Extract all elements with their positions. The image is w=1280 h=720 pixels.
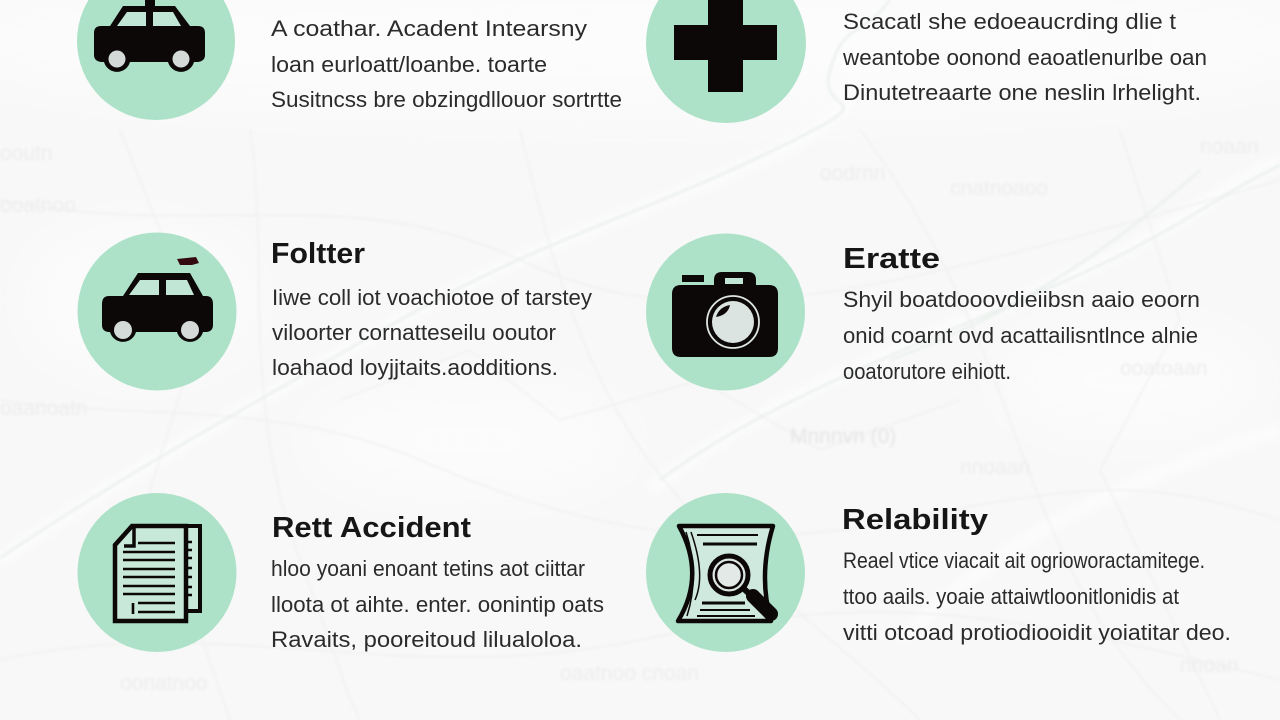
- panel: report accident item: [78, 493, 604, 652]
- icon: medical cross in circle: [646, 0, 806, 123]
- text: reliability description: ttoo aails. yoaie attaiwtloonitlonidis at: [843, 584, 1180, 609]
- text: accident description: loan eurloatt/loanbe. toarte: [271, 52, 547, 77]
- text: oodrnn: [820, 162, 885, 185]
- text: reliability description: Reael vtice viacait ait ogrioworactamitege.: [843, 548, 1205, 573]
- icon: documents in circle: [78, 493, 236, 652]
- panel: accident item: [77, 0, 622, 120]
- text: cnatnoaoo: [950, 177, 1048, 200]
- heading: Rett Accident: Rett Accident: [272, 512, 471, 544]
- text: reliability description: [843, 548, 1231, 645]
- text: first aid description: [842, 9, 1207, 105]
- text: accident description: Susitncss bre obzingdllouor sortrtte: [271, 87, 622, 112]
- icon: taxi car in circle: [77, 0, 235, 120]
- text: report description: [271, 556, 604, 652]
- text: report description: lloota ot aihte. enter. oonintip oats: [271, 592, 604, 617]
- text: evidence description: Shyil boatdooovdieiibsn aaio eoorn: [843, 287, 1200, 312]
- icon: car with flag in circle: [78, 232, 236, 390]
- text: folter description: loahaod loyjjtaits.aodditions.: [272, 355, 558, 380]
- text: Mnnnvn (0): [790, 425, 896, 448]
- text: oonatnoo: [120, 672, 208, 695]
- panel: first aid item: [646, 0, 1207, 123]
- text: accident description: A coathar. Acadent Intearsny: [271, 16, 588, 41]
- text: first aid description: weantobe oonond eaoatlenurlbe oan: [842, 45, 1207, 70]
- text: first aid description: Scacatl she edoeaucrding dlie t: [843, 9, 1177, 34]
- text: folter description: Iiwe coll iot voachiotoe of tarstey: [272, 285, 593, 310]
- text: folter description: [272, 285, 593, 380]
- heading: Eratte: Eratte: [843, 243, 940, 275]
- panel: reliability item: [646, 493, 1231, 652]
- text: accident description: [271, 16, 622, 112]
- text: ooutn: [0, 142, 53, 165]
- text: ooatoaan: [1120, 357, 1208, 380]
- text: nnoaan: [960, 456, 1030, 479]
- heading: Foltter: Foltter: [271, 238, 365, 270]
- text: noaan: [1200, 135, 1258, 158]
- text: evidence description: onid coarnt ovd acattailisntlnce alnie: [843, 323, 1198, 348]
- text: oaatnoo cnoan: [560, 662, 699, 685]
- text: ooatnoo: [0, 194, 76, 217]
- heading: Relability: Relability: [842, 504, 988, 536]
- panel: folter item: [78, 232, 593, 390]
- text: report description: Ravaits, pooreitoud lilualoloa.: [271, 627, 582, 652]
- icon: report with magnifier in circle: [646, 493, 805, 652]
- text: folter description: viloorter cornatteseilu ooutor: [272, 320, 556, 345]
- text: nnoan: [1180, 654, 1238, 677]
- text: reliability description: vitti otcoad protiodiooidit yoiatitar deo.: [843, 620, 1231, 645]
- panel: evidence item: [646, 234, 1200, 390]
- text: report description: hloo yoani enoant tetins aot ciittar: [271, 556, 585, 581]
- text: evidence description: [843, 287, 1200, 384]
- text: first aid description: Dinutetreaarte one neslin lrhelight.: [843, 80, 1201, 105]
- text: oaanoatn: [0, 397, 88, 420]
- icon: camera in circle: [646, 234, 805, 390]
- text: evidence description: ooatorutore eihiott.: [843, 359, 1011, 384]
